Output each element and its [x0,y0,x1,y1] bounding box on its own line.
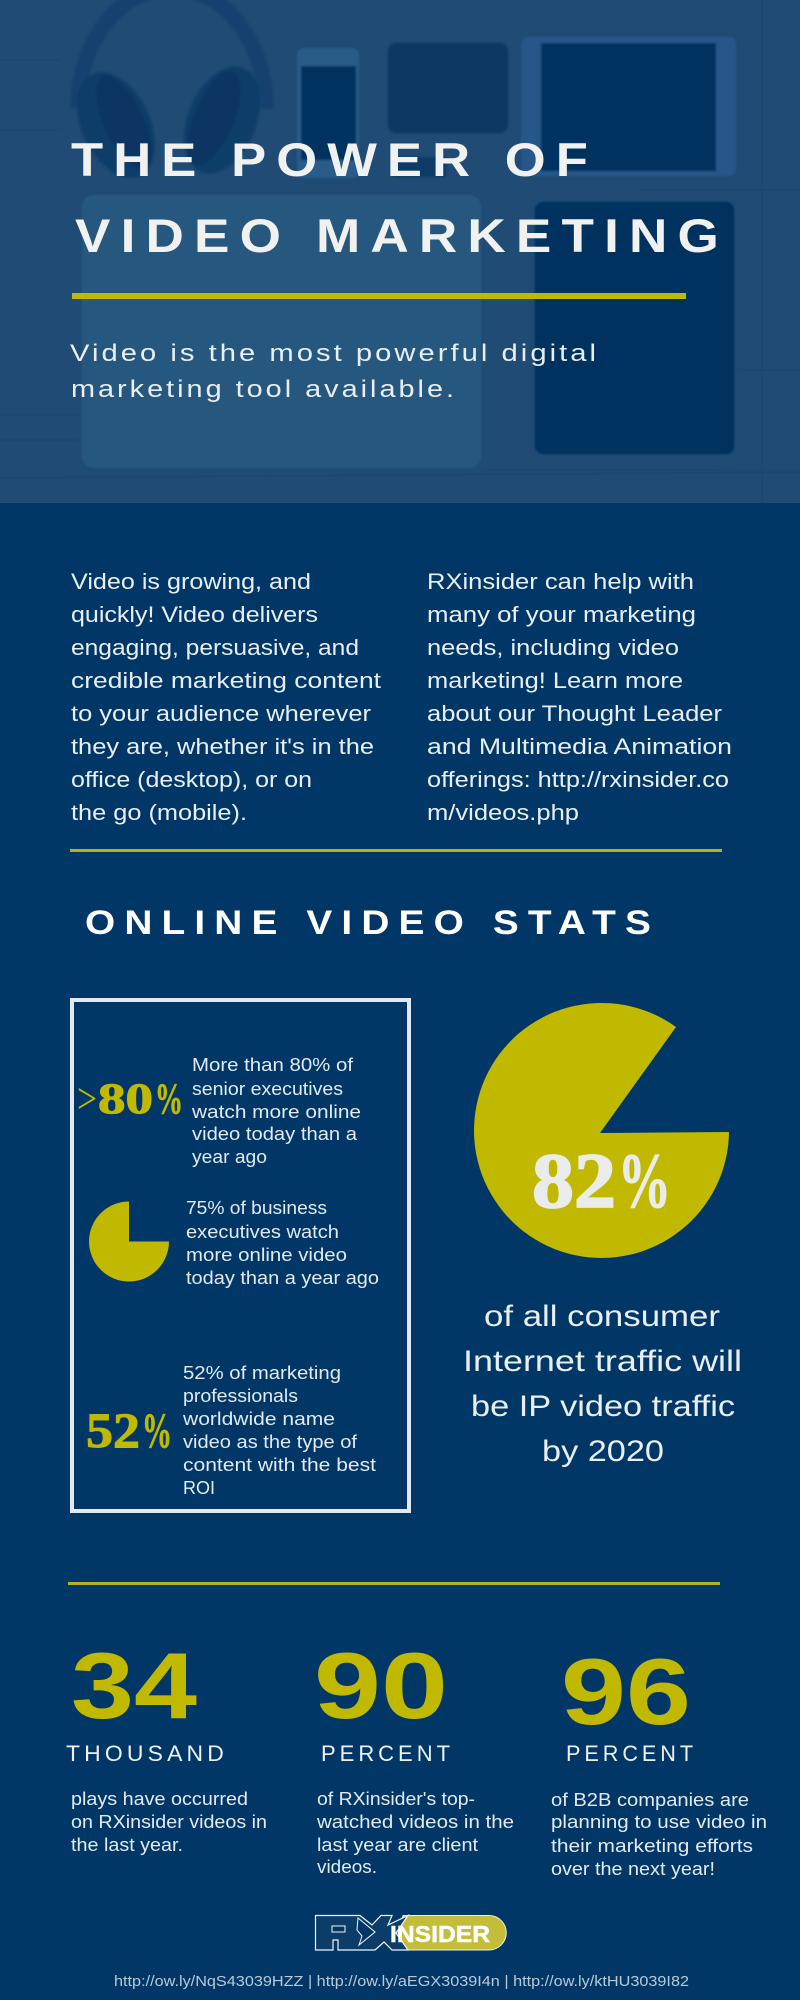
chart: 82 percent pie [474,1003,729,1258]
text block: RXinsider can help: m/videos.php [427,800,579,825]
text: marketing professionals [182,1363,376,1498]
description: of B2B companies are [551,1790,749,1810]
text: marketing professionals: 52% of marketing [183,1363,341,1383]
stat: greater than 80 percent: 80 [98,1076,153,1123]
text block: video is growing: they are, whether it's in the [71,734,374,759]
text: business executives: more online video [186,1245,347,1265]
title [71,133,729,262]
text: senior executives: video today than a [192,1124,358,1144]
text block: RXinsider can help: about our Thought Leader [427,701,722,726]
pie value [532,1137,671,1224]
chart: 75 percent pie [89,1202,169,1282]
text: senior executives: senior executives [192,1079,343,1099]
pie value: 82 [532,1137,616,1224]
icon: laptop [82,195,481,468]
text block: video is growing [71,569,381,825]
stat: greater than 80 percent [77,1076,183,1123]
pie shape [474,1003,729,1258]
logo pill [398,1916,506,1950]
divider line [70,849,722,852]
title: THE POWER OF [71,133,598,186]
text: marketing professionals: video as the type of [183,1432,358,1452]
hero background wood [0,0,800,503]
logo chevron [357,1918,375,1945]
text: marketing professionals: ROI [183,1478,215,1498]
subtitle [70,340,599,403]
text: senior executives: year ago [192,1147,267,1167]
text block: video is growing: quickly! Video delivers [71,602,318,627]
icon: speaker [388,43,508,133]
logo wordmark: INSIDER [390,1921,490,1947]
icon: tablet [521,37,736,176]
description: the last year. [71,1835,183,1855]
text: senior executives: More than 80% of [192,1055,354,1075]
unit: THOUSAND [66,1741,228,1766]
text: business executives [186,1198,379,1288]
icon: smartphone [297,48,359,178]
text block: RXinsider can help: offerings: http://rxinsider.co [427,767,729,792]
wood grain details [0,0,800,503]
text block: RXinsider can help: marketing! Learn more [427,668,683,693]
logo: RX Insider [316,1916,506,1950]
stat: greater than 80 percent: % [155,1076,183,1123]
description: their marketing efforts [551,1836,753,1856]
subtitle: marketing tool available. [71,376,457,403]
text block: consumer internet traffic: of all consumer [484,1300,720,1333]
text block: consumer internet traffic: by 2020 [542,1435,664,1468]
title: VIDEO MARKETING [75,209,729,262]
title underline [72,293,686,299]
text block: video is growing: credible marketing content [71,668,381,693]
stat column: 96 percent [551,1639,767,1879]
text: senior executives: watch more online [191,1102,361,1122]
panel: hero header with desk photo [0,0,800,503]
description: videos. [317,1857,377,1877]
icon: headphones [62,0,275,190]
text: senior executives [191,1055,361,1167]
text block: video is growing: the go (mobile). [71,800,247,825]
text block: RXinsider can help: many of your marketing [427,602,696,627]
description: of RXinsider's top- [317,1789,475,1809]
divider line [68,1582,720,1585]
photo objects [62,0,736,468]
stat column: 34 thousand [66,1633,267,1855]
text: marketing professionals: content with the best [183,1455,376,1475]
text: marketing professionals: worldwide name [182,1409,335,1429]
icon: dark tablet [534,200,736,456]
stat: 52 percent: % [142,1402,172,1458]
stat column: 90 percent [314,1633,514,1877]
unit: PERCENT [321,1741,454,1766]
logo R counter [332,1926,345,1932]
number: 34 [71,1633,197,1738]
description: watched videos in the [316,1812,514,1832]
stat: 52 percent [86,1402,172,1458]
text block: RXinsider can help [427,569,732,825]
heading: online video stats: ONLINE VIDEO STATS [85,904,660,942]
text block: video is growing: Video is growing, and [71,569,311,594]
description: over the next year! [551,1859,715,1879]
subtitle: Video is the most powerful digital [70,340,599,367]
stat: greater than 80 percent: > [77,1076,97,1123]
pie value: % [618,1137,671,1224]
panel: stats box [72,1000,409,1511]
stat: 52 percent: 52 [86,1402,140,1458]
description: on RXinsider videos in [71,1812,267,1832]
text block: RXinsider can help: and Multimedia Animation [427,734,732,759]
text: business executives: 75% of business [186,1198,327,1218]
text block: consumer internet traffic: Internet traffic will [463,1345,742,1378]
text: business executives: today than a year ago [186,1268,379,1288]
description: last year are client [317,1835,478,1855]
text: marketing professionals: professionals [183,1386,298,1406]
description [316,1789,514,1877]
description: plays have occurred [71,1789,248,1809]
box frame [72,1000,409,1511]
description: planning to use video in [551,1812,767,1832]
text block: consumer internet traffic: be IP video traffic [471,1390,735,1423]
footer source links: http://ow.ly/NqS43039HZZ | http://ow.ly/aEGX3039I4n | http://ow.ly/ktHU3039I82 [114,1973,689,1990]
logo RX mark [316,1916,408,1950]
text block: video is growing: engaging, persuasive, and [71,635,359,660]
text block: video is growing: office (desktop), or on [71,767,312,792]
unit: PERCENT [566,1741,697,1766]
text block: RXinsider can help: RXinsider can help with [427,569,694,594]
number: 96 [561,1639,691,1744]
text block: video is growing: to your audience wherever [71,701,371,726]
text: business executives: executives watch [186,1222,339,1242]
description [71,1789,267,1855]
icon: small device [393,157,446,177]
number: 90 [314,1633,448,1738]
text block: consumer internet traffic [463,1300,742,1468]
description [551,1790,767,1879]
text block: RXinsider can help: needs, including video [427,635,679,660]
